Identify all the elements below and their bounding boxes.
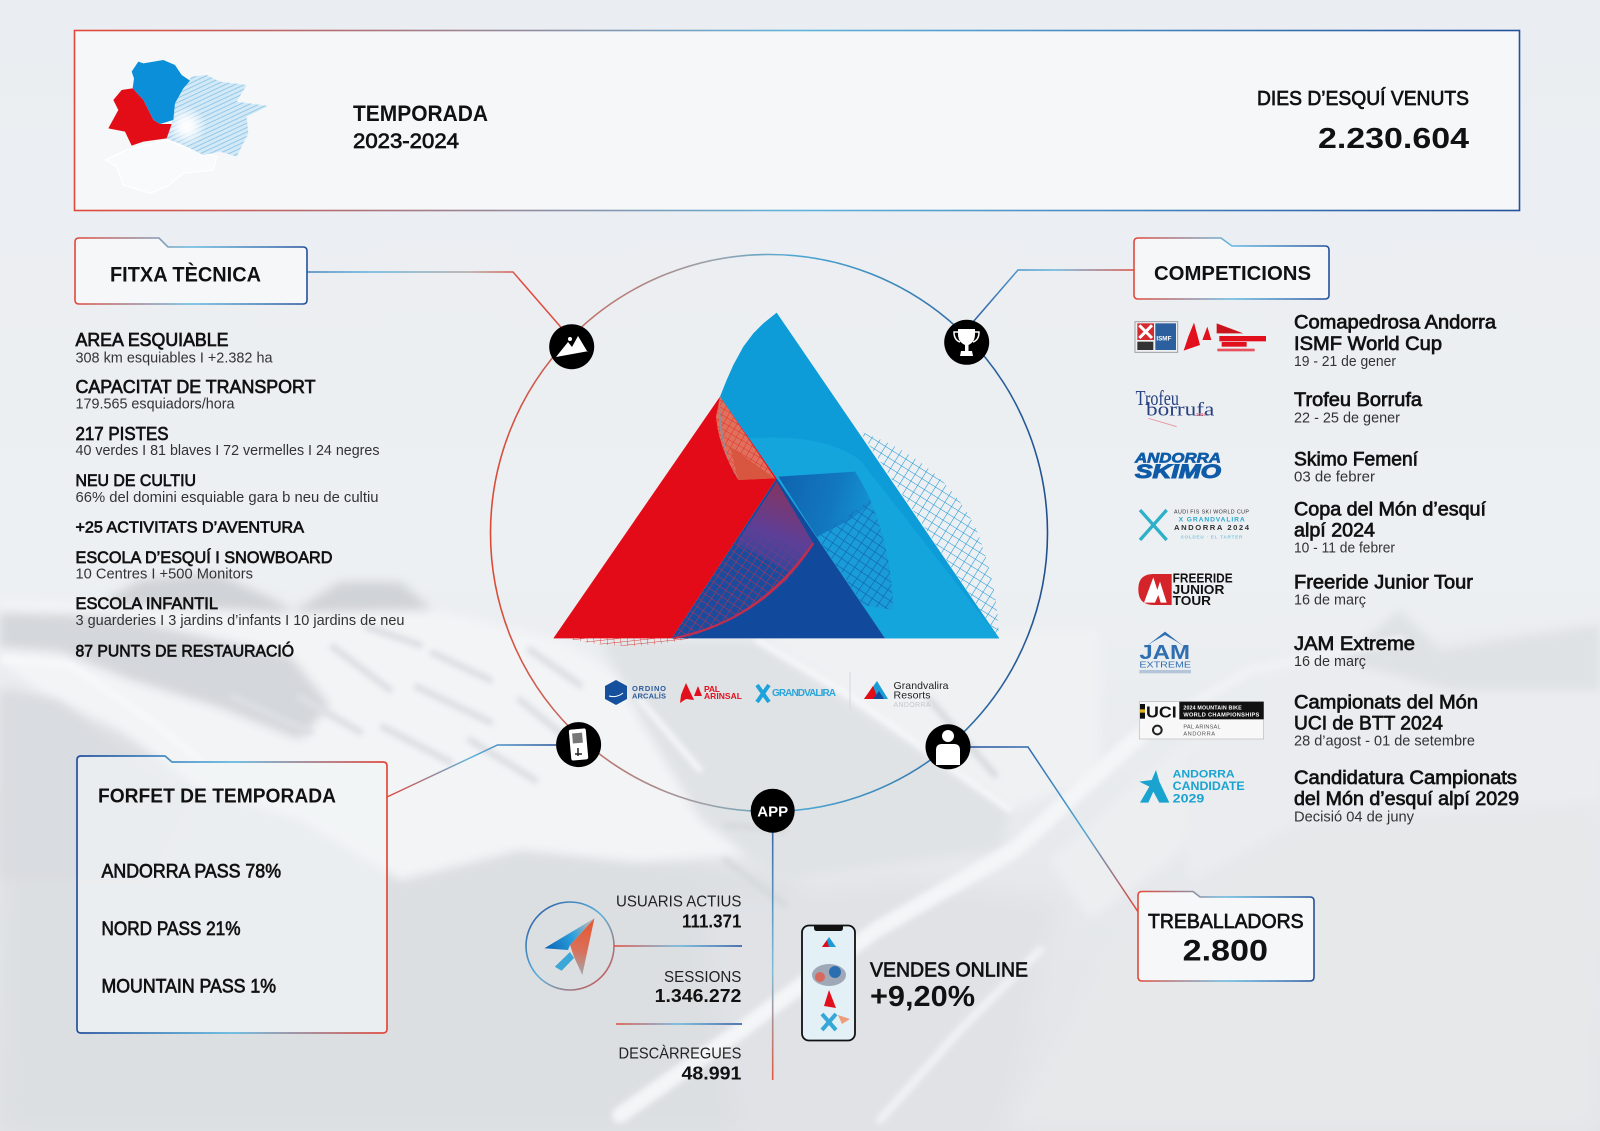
- stat: vendes online: [870, 960, 1028, 1013]
- logo: Grandvalira Resorts: Grandvalira: [894, 680, 949, 692]
- logo: Ordino Arcalís: ARCALÍS: [632, 692, 666, 700]
- logo: Grandvalira Resorts: ANDORRA: [894, 702, 931, 709]
- text block: fitxa tècnica list: 179.565 esquiadors/hora: [76, 396, 235, 412]
- competition: Comapedrosa: ISMF: [1156, 336, 1172, 343]
- text block: fitxa tècnica list: 3 guarderies I 3 jardins d’infants I 10 jardins de neu: [76, 612, 404, 629]
- connector: fitxa tècnica: [307, 272, 572, 340]
- connector: forfet: [387, 745, 556, 797]
- stat: usuaris actius: 111.371: [682, 911, 741, 931]
- stat: sessions: [655, 969, 741, 1006]
- connector: competicions: [973, 270, 1134, 322]
- panel: season header: [74, 30, 1520, 210]
- connector: treballadors: [970, 747, 1138, 911]
- stat: ski days sold: 2.230.604: [1318, 123, 1469, 155]
- text block: fitxa tècnica list: 87 PUNTS DE RESTAURACIÓ: [76, 642, 294, 660]
- logo: Grandvalira: [757, 685, 836, 702]
- text block: fitxa tècnica list: CAPACITAT DE TRANSPORT: [76, 377, 316, 397]
- logo: Pal Arinsal: [680, 683, 742, 703]
- panel heading: competicions: COMPETICIONS: [1154, 263, 1311, 285]
- competition: Skimo Femení: [1134, 449, 1419, 486]
- panel heading: fitxa tècnica: FITXA TÈCNICA: [110, 264, 261, 286]
- competition: UCI BTT: WORLD CHAMPIONSHIPS: [1183, 713, 1260, 719]
- competition: Freeride Junior Tour: JUNIOR: [1173, 583, 1224, 597]
- stat: ski days sold: [1257, 87, 1469, 155]
- title: season: 2023-2024: [353, 130, 459, 153]
- competition: Comapedrosa: 19 - 21 de gener: [1294, 353, 1396, 370]
- competition: UCI BTT: UCI: [1146, 705, 1177, 722]
- competition: Trofeu Borrufa: Trofeu: [1136, 388, 1179, 410]
- competition: Trofeu Borrufa: 2024: [1196, 412, 1206, 417]
- text block: fitxa tècnica list: AREA ESQUIABLE: [76, 330, 228, 350]
- competition: Freeride Junior Tour: TOUR: [1173, 594, 1211, 608]
- connector: app vertical line: [772, 832, 774, 1080]
- stat: vendes online: VENDES ONLINE: [870, 960, 1028, 982]
- stat: sessions: 1.346.272: [655, 986, 741, 1006]
- competition: Freeride Junior Tour: Freeride Junior Tour: [1294, 572, 1474, 593]
- competition: Copa del Món: SOLDEU · EL TARTER: [1181, 534, 1243, 539]
- panel: forfet de temporada: [77, 756, 387, 1033]
- stat: descàrregues: DESCÀRREGUES: [618, 1044, 741, 1063]
- title: season: [353, 101, 488, 153]
- icon: season pass QR: [556, 722, 601, 767]
- text block: fitxa tècnica list: 10 Centres I +500 Monitors: [76, 566, 253, 582]
- competition: Andorra Candidate 2029: ANDORRA: [1173, 768, 1235, 780]
- competition: UCI BTT: UCI de BTT 2024: [1294, 713, 1443, 734]
- competition: UCI BTT: ANDORRA: [1183, 731, 1215, 737]
- logo: Ordino Arcalís: [605, 680, 666, 705]
- text block: fitxa tècnica list: ESCOLA INFANTIL: [76, 594, 218, 613]
- stat: ski days sold: DIES D’ESQUÍ VENUTS: [1257, 87, 1469, 110]
- panel: treballadors: TREBALLADORS: [1148, 911, 1304, 933]
- competition: JAM Extreme: 16 de març: [1294, 653, 1366, 670]
- competition: Copa del Món: AUDI FIS SKI WORLD CUP: [1174, 509, 1249, 515]
- competition: Andorra Candidate 2029: Decisió 04 de juny: [1294, 809, 1414, 826]
- competition: Andorra Candidate 2029: del Món d’esquí alpí 2029: [1294, 789, 1519, 810]
- text block: fitxa tècnica list: [76, 330, 404, 660]
- competition: UCI BTT: 2024 MOUNTAIN BIKE: [1183, 705, 1242, 711]
- stat: usuaris actius: USUARIS ACTIUS: [616, 894, 741, 911]
- competition: UCI BTT: 28 d’agost - 01 de setembre: [1294, 733, 1475, 750]
- title: season: TEMPORADA: [353, 101, 488, 126]
- competition: JAM Extreme: EXTREME: [1139, 659, 1192, 669]
- text block: fitxa tècnica list: +25 ACTIVITATS D’AVENTURA: [76, 520, 304, 536]
- panel: forfet de temporada: NORD PASS 21%: [102, 919, 241, 940]
- competition: Skimo Femení: 03 de febrer: [1294, 469, 1375, 486]
- competition: Copa del Món: 10 - 11 de febrer: [1294, 540, 1395, 557]
- competition: Copa del Món: Copa del Món d’esquí: [1294, 499, 1487, 520]
- competition: Skimo Femení: ANDORRA: [1134, 451, 1221, 466]
- competition: Freeride Junior Tour: 16 de març: [1294, 591, 1366, 608]
- stat: descàrregues: [618, 1044, 741, 1083]
- competition: Comapedrosa: [1135, 312, 1496, 370]
- icon: phone: [802, 926, 855, 1040]
- text block: fitxa tècnica list: NEU DE CULTIU: [76, 471, 196, 490]
- competition: Skimo Femení: SKIMO: [1135, 462, 1221, 483]
- competition: JAM Extreme: JAM: [1139, 641, 1190, 664]
- logo: Grandvalira: GRANDVALIRA: [772, 688, 836, 699]
- panel heading: competicions: [1134, 238, 1329, 299]
- stat: descàrregues: 48.991: [682, 1063, 741, 1083]
- logo: Grandvalira Resorts: [864, 680, 949, 709]
- icon: mountain: [549, 324, 594, 369]
- text block: fitxa tècnica list: 217 PISTES: [76, 424, 168, 444]
- competition: UCI BTT: [1139, 692, 1478, 750]
- panel: treballadors: 2.800: [1183, 935, 1268, 968]
- competition: Andorra Candidate 2029: 2029: [1173, 793, 1205, 806]
- stat: usuaris actius: [616, 894, 741, 931]
- panel: forfet de temporada: FORFET DE TEMPORADA: [98, 786, 336, 808]
- competition: Freeride Junior Tour: FREERIDE: [1173, 572, 1233, 586]
- list: competitions: [1134, 312, 1519, 826]
- competition: Copa del Món: alpí 2024: [1294, 521, 1375, 542]
- competition: Freeride Junior Tour: [1138, 572, 1474, 608]
- stat: vendes online: +9,20%: [870, 981, 975, 1013]
- competition: Copa del Món: [1140, 499, 1487, 557]
- logo: Grandvalira Resorts: Resorts: [894, 689, 930, 701]
- competition: UCI BTT: PAL ARINSAL: [1183, 724, 1221, 730]
- competition: JAM Extreme: JAM Extreme: [1294, 634, 1415, 655]
- competition: Copa del Món: X GRANDVALIRA: [1179, 516, 1245, 523]
- competition: Comapedrosa: Comapedrosa Andorra: [1294, 312, 1496, 333]
- panel: treballadors: [1138, 892, 1314, 981]
- logo: Pal Arinsal: PAL: [704, 684, 720, 694]
- panel: forfet de temporada: MOUNTAIN PASS 1%: [102, 977, 276, 998]
- competition: Trofeu Borrufa: 22 - 25 de gener: [1294, 410, 1400, 427]
- competition: Skimo Femení: Skimo Femení: [1294, 449, 1419, 470]
- text block: fitxa tècnica list: 40 verdes I 81 blaves I 72 vermelles I 24 negres: [76, 442, 380, 459]
- icon: Andorra map: [105, 60, 268, 193]
- logo: Pal Arinsal: ARINSAL: [704, 691, 742, 701]
- competition: UCI BTT: Campionats del Món: [1294, 692, 1478, 713]
- text block: fitxa tècnica list: 66% del domini esquiable gara b neu de cultiu: [76, 489, 378, 506]
- competition: Trofeu Borrufa: Trofeu Borrufa: [1294, 390, 1422, 411]
- icon: APP badge: [751, 789, 795, 833]
- text block: fitxa tècnica list: 308 km esquiables I +2.382 ha: [76, 350, 273, 366]
- icon: person: [926, 724, 970, 769]
- panel: forfet de temporada: ANDORRA PASS 78%: [102, 862, 281, 883]
- central triangle logo: [553, 313, 999, 646]
- icon: app arrow: [526, 902, 614, 990]
- text block: fitxa tècnica list: ESCOLA D’ESQUÍ I SNOWBOARD: [76, 548, 332, 567]
- competition: Trofeu Borrufa: borrufa: [1146, 399, 1215, 420]
- competition: Trofeu Borrufa: [1136, 388, 1422, 427]
- app section: [526, 789, 1028, 1083]
- panel heading: fitxa tècnica: [75, 238, 307, 304]
- icon: trophy: [944, 320, 989, 365]
- competition: Andorra Candidate 2029: Candidatura Campionats: [1294, 768, 1517, 789]
- central circle: [490, 254, 1048, 812]
- icon: APP badge: APP: [757, 804, 788, 820]
- competition: Andorra Candidate 2029: [1139, 768, 1519, 826]
- competition: Comapedrosa: ISMF World Cup: [1294, 334, 1442, 355]
- competition: Andorra Candidate 2029: CANDIDATE: [1173, 780, 1245, 793]
- competition: Copa del Món: ANDORRA 2024: [1174, 523, 1250, 532]
- resort logos: [605, 672, 949, 710]
- stat: sessions: SESSIONS: [664, 969, 741, 986]
- logo: Ordino Arcalís: ORDINO: [632, 684, 666, 693]
- competition: JAM Extreme: [1139, 632, 1415, 673]
